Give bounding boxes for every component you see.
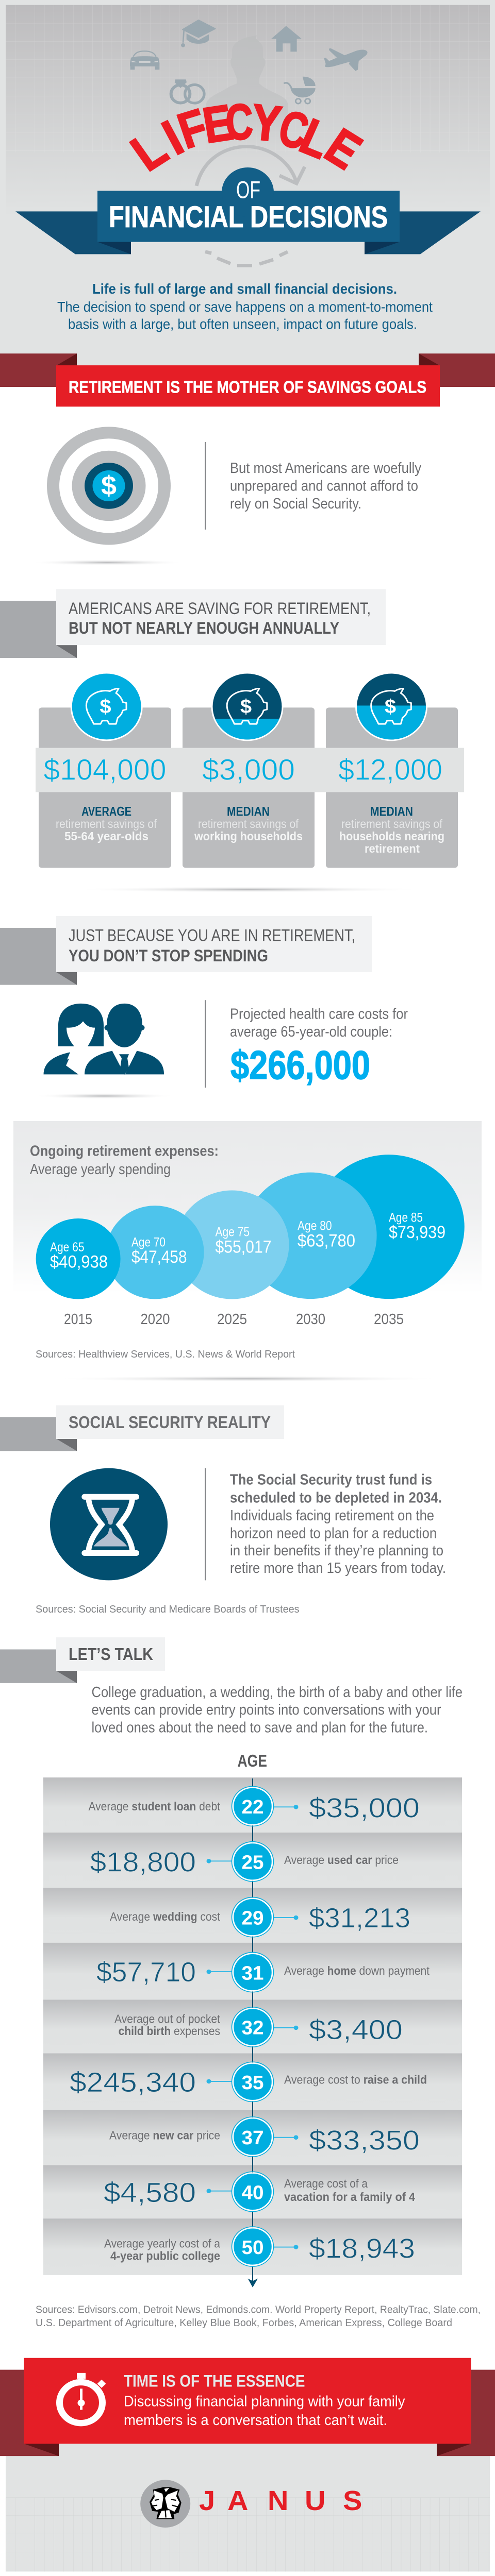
dollar amounts: $35,000 bbox=[309, 1792, 420, 1823]
silhouette of a person bbox=[206, 36, 288, 172]
amount strip bbox=[36, 748, 464, 792]
text block: social security trust fund: The Social Security trust fund is bbox=[230, 1471, 432, 1488]
callout: time is of the essence: TIME IS OF THE ESSENCE bbox=[124, 2372, 305, 2391]
sources: timeline bbox=[36, 2304, 481, 2329]
sources: social security: Sources: Social Security and Medicare Boards of Trustees bbox=[36, 1603, 300, 1615]
card 3 text: retirement savings of bbox=[341, 818, 442, 831]
text block: health care costs: average 65-year-old couple: bbox=[230, 1023, 392, 1040]
row labels: Average wedding cost bbox=[110, 1910, 220, 1923]
age numbers: 25 bbox=[241, 1852, 264, 1873]
text block: social security trust fund: Individuals facing retirement on the bbox=[230, 1507, 434, 1524]
piggy bank: full bbox=[71, 672, 143, 741]
bubble chart: $55,017 bbox=[216, 1237, 271, 1257]
row labels: Average new car price bbox=[109, 2129, 220, 2142]
dollar amounts: $57,710 bbox=[96, 1956, 196, 1988]
bubble chart: Age 70 bbox=[131, 1235, 166, 1249]
card 3 text: households nearing bbox=[339, 830, 444, 843]
icon: baby stroller bbox=[285, 77, 316, 104]
card 1 text bbox=[56, 805, 157, 843]
bubble chart: $47,458 bbox=[131, 1247, 187, 1267]
icon group: life events bbox=[130, 20, 368, 104]
icon: car bbox=[130, 51, 159, 70]
heading: let's talk bbox=[0, 1637, 165, 1683]
title: LIFECYCLE: E bbox=[199, 95, 237, 154]
heading: let's talk: LET’S TALK bbox=[69, 1645, 153, 1664]
piggy bank: half: $ bbox=[385, 696, 396, 718]
bubble chart: Age 75 bbox=[216, 1225, 250, 1239]
heading: social security reality bbox=[0, 1405, 284, 1451]
bubble chart: $73,939 bbox=[389, 1223, 446, 1242]
sources: healthview: Sources: Healthview Services, U.S. News & World Report bbox=[36, 1348, 295, 1360]
piggy bank: low: $ bbox=[240, 696, 252, 718]
amounts: $3,000 bbox=[202, 754, 295, 786]
sources: healthview bbox=[36, 1348, 443, 1382]
card 2 text: retirement savings of bbox=[198, 818, 299, 831]
row labels: Average home down payment bbox=[284, 1964, 430, 1977]
dollar amounts bbox=[70, 1792, 420, 2264]
amounts: $12,000 bbox=[338, 754, 442, 786]
text block: college graduation bbox=[92, 1684, 463, 1736]
text block: woefully unprepared bbox=[205, 442, 421, 530]
title: LIFECYCLE: C bbox=[225, 94, 254, 150]
age numbers: 50 bbox=[241, 2237, 264, 2259]
title: LIFECYCLE: C bbox=[273, 100, 314, 160]
card 1 text: 55-64 year-olds bbox=[64, 830, 148, 843]
age numbers: 40 bbox=[241, 2182, 264, 2204]
row backgrounds bbox=[43, 1777, 462, 2275]
row labels: Average student loan debt bbox=[89, 1800, 220, 1813]
panel: ongoing retirement expenses: Average yearly spending bbox=[30, 1161, 171, 1178]
panel: ongoing retirement expenses: Ongoing retirement expenses: bbox=[30, 1143, 219, 1160]
piggy bank: low bbox=[211, 672, 284, 741]
year labels: 2020 bbox=[140, 1311, 170, 1328]
heading: in retirement: JUST BECAUSE YOU ARE IN RETIREMENT, bbox=[69, 926, 355, 945]
row labels: Average yearly cost of a bbox=[104, 2237, 221, 2250]
icon: graduation cap bbox=[181, 20, 216, 47]
year labels: 2025 bbox=[217, 1311, 247, 1328]
heading: in retirement: YOU DON’T STOP SPENDING bbox=[69, 946, 268, 965]
text block: college graduation: loved ones about the need to save and plan for the future. bbox=[92, 1719, 428, 1736]
bubble chart: $40,938 bbox=[50, 1252, 108, 1272]
heading: americans are saving: AMERICANS ARE SAVING FOR RETIREMENT, bbox=[69, 600, 371, 618]
bubble chart bbox=[36, 1155, 465, 1299]
hero background panel bbox=[0, 0, 495, 366]
heading: in retirement bbox=[0, 916, 372, 985]
age timeline bbox=[43, 1752, 462, 2287]
dollar amounts: $3,400 bbox=[309, 2014, 403, 2045]
title: LIFECYCLE: I bbox=[154, 110, 192, 165]
row labels: Average cost of a bbox=[284, 2177, 368, 2190]
row labels: Average out of pocket bbox=[114, 2012, 220, 2025]
age numbers: 22 bbox=[241, 1797, 264, 1818]
year labels: 2035 bbox=[374, 1311, 404, 1328]
icon: wedding rings bbox=[171, 79, 204, 103]
text block: social security trust fund: horizon need to plan for a reduction bbox=[230, 1525, 437, 1541]
text block: social security trust fund: scheduled to be depleted in 2034. bbox=[230, 1489, 442, 1506]
timeline axis arrow bbox=[248, 1778, 258, 2287]
text block: woefully unprepared: unprepared and cannot afford to bbox=[230, 478, 418, 494]
text block: health care costs: Projected health care costs for bbox=[230, 1006, 408, 1022]
age circle outlines bbox=[232, 1786, 273, 2266]
card 2 text: working households bbox=[194, 830, 303, 843]
title: LIFECYCLE bbox=[121, 94, 371, 181]
card 3 text: retirement bbox=[365, 842, 420, 855]
icon: airplane bbox=[324, 48, 368, 71]
savings cards bbox=[36, 672, 464, 892]
age numbers bbox=[241, 1797, 264, 2259]
bubble chart: Age 80 bbox=[298, 1219, 332, 1233]
text block: woefully unprepared: But most Americans are woefully bbox=[230, 460, 421, 477]
callout: time is of the essence: Discussing financial planning with your family bbox=[124, 2393, 405, 2410]
heading: americans are saving: BUT NOT NEARLY ENOUGH ANNUALLY bbox=[69, 619, 339, 638]
piggy bank: full: $ bbox=[100, 696, 111, 718]
text block: college graduation: events can provide entry points into conversations with your bbox=[92, 1702, 441, 1718]
year labels: 2030 bbox=[296, 1311, 325, 1328]
text block: social security trust fund bbox=[205, 1468, 446, 1580]
title ribbon bbox=[15, 167, 481, 254]
icon: stopwatch bbox=[60, 2373, 106, 2423]
logo mark: two-faced head bbox=[140, 2480, 190, 2528]
circular arrow behind title bbox=[196, 146, 305, 265]
logo: Janus: JANUS bbox=[199, 2485, 362, 2516]
title ribbon: FINANCIAL DECISIONS bbox=[109, 200, 388, 234]
age numbers: 29 bbox=[241, 1907, 264, 1929]
logo: Janus bbox=[140, 2480, 362, 2528]
icon: hourglass bbox=[50, 1468, 168, 1580]
row labels: child birth expenses bbox=[119, 2025, 220, 2038]
card 3 text: MEDIAN bbox=[370, 805, 413, 819]
intro text: Life is full of large and small financial decisions. bbox=[92, 281, 397, 297]
dollar amounts: $33,350 bbox=[309, 2125, 420, 2156]
row labels: Average cost to raise a child bbox=[284, 2073, 427, 2087]
dollar amounts: $18,943 bbox=[309, 2233, 415, 2264]
title: LIFECYCLE: E bbox=[315, 118, 371, 180]
text block: health care costs: $266,000 bbox=[230, 1042, 370, 1088]
icon: house bbox=[271, 26, 302, 52]
bubble chart: Age 85 bbox=[389, 1211, 423, 1225]
red banner: retirement bbox=[0, 353, 495, 406]
title: LIFECYCLE: F bbox=[171, 99, 214, 160]
title: LIFECYCLE: Y bbox=[249, 94, 284, 152]
piggy bank: half bbox=[355, 672, 427, 741]
row labels bbox=[89, 1800, 430, 2262]
callout: time is of the essence bbox=[0, 2358, 495, 2456]
bubble chart: Age 65 bbox=[50, 1240, 85, 1255]
sources: timeline: U.S. Department of Agriculture, Kelley Blue Book, Forbes, American Express, College Board bbox=[36, 2317, 452, 2329]
year labels bbox=[64, 1311, 404, 1328]
callout: time is of the essence: members is a conversation that can’t wait. bbox=[124, 2412, 387, 2429]
connector dots bbox=[206, 1805, 298, 2249]
age circles bbox=[233, 1788, 272, 2265]
text block: health care costs bbox=[205, 1000, 408, 1088]
card 2 text bbox=[194, 805, 303, 843]
heading: americans are saving bbox=[0, 589, 386, 658]
text block: woefully unprepared: rely on Social Security. bbox=[230, 495, 361, 512]
age numbers: 31 bbox=[241, 1962, 264, 1984]
amounts: $104,000 bbox=[43, 754, 167, 786]
intro text: basis with a large, but often unseen, impact on future goals. bbox=[68, 316, 417, 332]
card 2 text: MEDIAN bbox=[227, 805, 270, 819]
icon: target with dollar: $ bbox=[101, 471, 117, 501]
title ribbon: OF bbox=[236, 177, 260, 204]
row labels: 4-year public college bbox=[110, 2249, 220, 2262]
row labels: vacation for a family of 4 bbox=[284, 2190, 415, 2204]
card 1 text: retirement savings of bbox=[56, 818, 157, 831]
card 3 text bbox=[339, 805, 444, 855]
footer panel bbox=[6, 2444, 490, 2571]
connectors bbox=[209, 1807, 296, 2247]
panel: ongoing retirement expenses bbox=[13, 1121, 482, 1328]
year labels: 2015 bbox=[64, 1311, 92, 1328]
age numbers: 35 bbox=[241, 2072, 264, 2094]
age numbers: 37 bbox=[241, 2127, 264, 2149]
dollar amounts: $4,580 bbox=[104, 2177, 196, 2208]
intro text bbox=[57, 281, 433, 332]
dollar amounts: $245,340 bbox=[70, 2066, 196, 2098]
text block: social security trust fund: retire more than 15 years from today. bbox=[230, 1560, 446, 1577]
heading: social security reality: SOCIAL SECURITY REALITY bbox=[69, 1413, 271, 1432]
intro text: The decision to spend or save happens on a moment-to-moment bbox=[57, 299, 433, 315]
title: LIFECYCLE: L bbox=[292, 108, 339, 170]
row labels: Average used car price bbox=[284, 1854, 399, 1867]
bubble chart: $63,780 bbox=[298, 1231, 355, 1250]
amounts bbox=[43, 754, 442, 786]
timeline heading: AGE bbox=[237, 1752, 267, 1771]
dollar amounts: $18,800 bbox=[90, 1846, 196, 1877]
icon: couple bbox=[34, 1004, 174, 1099]
text block: social security trust fund: in their benefits if they’re planning to bbox=[230, 1543, 443, 1559]
title: LIFECYCLE: L bbox=[121, 120, 177, 181]
icon: target with dollar bbox=[30, 427, 185, 566]
dollar amounts: $31,213 bbox=[309, 1902, 410, 1934]
age numbers: 32 bbox=[241, 2018, 264, 2039]
card backgrounds bbox=[39, 707, 458, 868]
card 1 text: AVERAGE bbox=[81, 805, 131, 819]
